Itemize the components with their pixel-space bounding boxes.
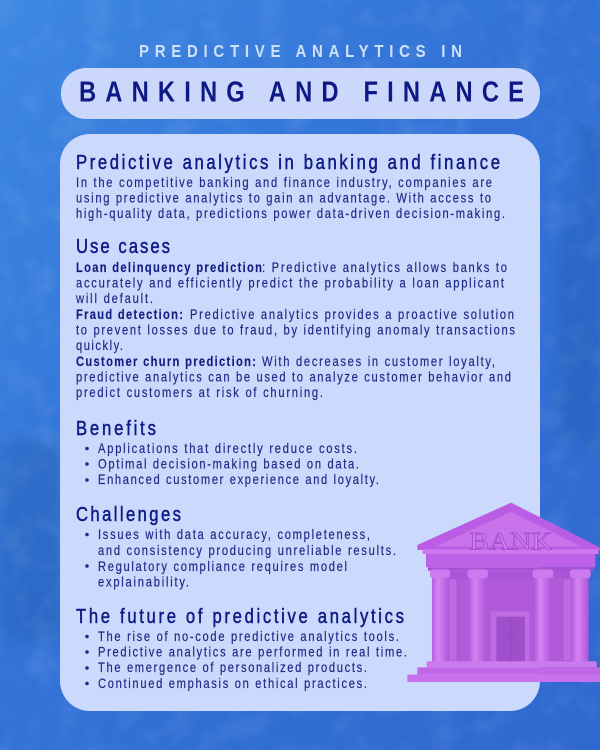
section: use cases: will default.: [75, 291, 153, 306]
steps: [407, 661, 600, 682]
section: benefits: [76, 417, 379, 487]
section: the future of predictive analytics: Continued emphasis on ethical practices.: [98, 676, 367, 691]
section: use cases: With decreases in customer loyalty,: [262, 354, 495, 369]
section: use cases: : Predictive analytics allows banks to: [262, 260, 507, 275]
section: challenges: Challenges: [76, 503, 181, 525]
section: challenges: Regulatory compliance requires model: [98, 559, 347, 574]
section: use cases: Use cases: [76, 235, 170, 257]
section: introduction: In the competitive banking and finance industry, companies are: [76, 175, 492, 190]
section: use cases: Predictive analytics provides a proactive solution: [190, 307, 514, 322]
section: benefits: Enhanced customer experience and loyalty.: [98, 472, 379, 487]
section: introduction: [76, 151, 505, 221]
section: challenges: and consistency producing unreliable results.: [98, 543, 396, 558]
section: use cases: Loan delinquency prediction: [76, 260, 262, 275]
section: the future of predictive analytics: The future of predictive analytics: [76, 605, 404, 627]
section: benefits: Applications that directly reduce costs.: [98, 441, 357, 456]
section: use cases: to prevent losses due to fraud, by identifying anomaly transactions: [76, 323, 515, 338]
section: challenges: explainability.: [98, 575, 189, 590]
section: benefits: Benefits: [76, 417, 156, 439]
section: use cases: predictive analytics can be used to analyze customer behavior and: [76, 370, 511, 385]
title pill: banking and finance: [61, 68, 540, 119]
section: the future of predictive analytics: [76, 605, 407, 691]
bank lettering: BANK: [469, 527, 553, 555]
section: use cases: Customer churn prediction:: [76, 354, 256, 369]
section: challenges: Issues with data accuracy, completeness,: [98, 527, 370, 542]
section: use cases: [75, 235, 515, 400]
section: use cases: predict customers at risk of churning.: [76, 385, 323, 400]
section: introduction: high-quality data, predictions power data-driven decision-making.: [76, 206, 505, 221]
title pill: banking and finance: BANKING AND FINANCE: [79, 75, 524, 108]
title line: predictive analytics in: PREDICTIVE ANALYTICS IN: [139, 41, 462, 61]
columns: [430, 569, 591, 661]
section: introduction: using predictive analytics to gain an advantage. With access to: [76, 191, 491, 206]
section: the future of predictive analytics: The emergence of personalized products.: [98, 660, 367, 675]
section: challenges: [76, 503, 396, 590]
section: use cases: accurately and efficiently predict the probability a loan applicant: [76, 276, 504, 291]
content panel: [60, 134, 540, 711]
section: the future of predictive analytics: The rise of no-code predictive analytics tools.: [98, 629, 399, 644]
section: use cases: quickly.: [76, 338, 123, 353]
door: [491, 611, 529, 661]
section: use cases: Fraud detection:: [76, 307, 183, 322]
section: introduction: Predictive analytics in banking and finance: [76, 151, 500, 173]
section: benefits: Optimal decision-making based on data.: [98, 457, 359, 472]
section: the future of predictive analytics: Predictive analytics are performed in real time.: [98, 645, 407, 660]
icon: purple bank building: [407, 503, 600, 682]
